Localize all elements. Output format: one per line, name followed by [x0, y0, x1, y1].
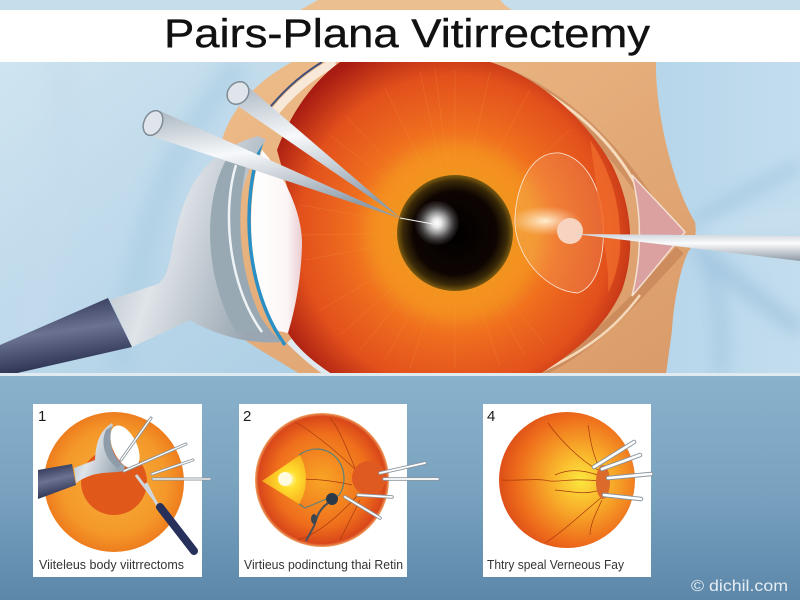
panel 1 [33, 404, 210, 577]
retina disc [255, 413, 389, 547]
lid shading [266, 62, 680, 374]
instruments [594, 442, 651, 499]
white lens [104, 421, 146, 473]
iris radial fibres [300, 68, 570, 368]
surgical drape, left [0, 62, 298, 373]
surgical drape, right [656, 62, 800, 373]
title: Pairs-Plana Vitirrectemy [164, 12, 650, 56]
panel 1 caption: Viiteleus body viitrrectoms [39, 558, 184, 572]
speculum body [74, 423, 125, 483]
cone glare [278, 472, 292, 486]
macular patch [352, 461, 386, 495]
lower blue background [0, 374, 800, 600]
speculum handle [0, 298, 132, 374]
white lens [251, 150, 302, 333]
iris inner glow [365, 142, 545, 322]
pupil [397, 175, 513, 291]
speculum cup [110, 136, 282, 347]
instruments [121, 418, 210, 479]
eyeball iris [277, 62, 630, 374]
light flare [511, 207, 578, 235]
bulb [311, 514, 317, 524]
panel 2 [239, 404, 438, 577]
right probe [575, 234, 800, 261]
instrument highlights [121, 418, 210, 479]
instruments [345, 463, 438, 518]
wire loop [299, 449, 344, 508]
drape folds [128, 62, 800, 372]
pink conjunctiva wedge [632, 175, 685, 296]
forceps shaft [136, 475, 158, 506]
blue scleral line [249, 142, 285, 345]
intraocular lens disc [515, 153, 603, 293]
panel 4 [483, 404, 651, 577]
step number 1: 1 [38, 408, 46, 425]
inner red disc [81, 449, 147, 515]
eyelid skin [222, 62, 696, 374]
retinal tear tissue [590, 140, 620, 293]
instrument highlights [345, 463, 438, 518]
pupil light reflection [415, 201, 459, 245]
dark lumen node [326, 493, 338, 505]
top strip background [0, 0, 800, 10]
middle cannula [139, 107, 433, 224]
retinal vessels [285, 418, 360, 540]
lens highlight dot [557, 218, 583, 244]
panel 4 caption: Thtry speal Verneous Fay [487, 558, 625, 572]
speculum inner channel [210, 150, 262, 330]
cup channel [103, 426, 122, 468]
instrument highlights [594, 442, 651, 499]
step number 2: 2 [243, 408, 251, 425]
cable with bulb [306, 503, 328, 541]
hero illustration: eye surgery [0, 62, 800, 374]
retinal vessels [502, 423, 602, 543]
optic disc [596, 465, 610, 499]
step number 4: 4 [487, 408, 495, 425]
divider line [0, 373, 800, 376]
speculum handle [38, 464, 76, 499]
upper cannula [223, 77, 402, 219]
title band [0, 10, 800, 62]
speculum inner rim [229, 165, 262, 332]
outer orange disc [44, 412, 184, 552]
copyright: © dichil.com [691, 578, 788, 595]
panel 2 caption: Virtieus podinctung thai Retin [244, 558, 403, 572]
forceps handle [160, 507, 194, 551]
retina disc [499, 412, 635, 548]
yellow light cone [262, 455, 306, 504]
